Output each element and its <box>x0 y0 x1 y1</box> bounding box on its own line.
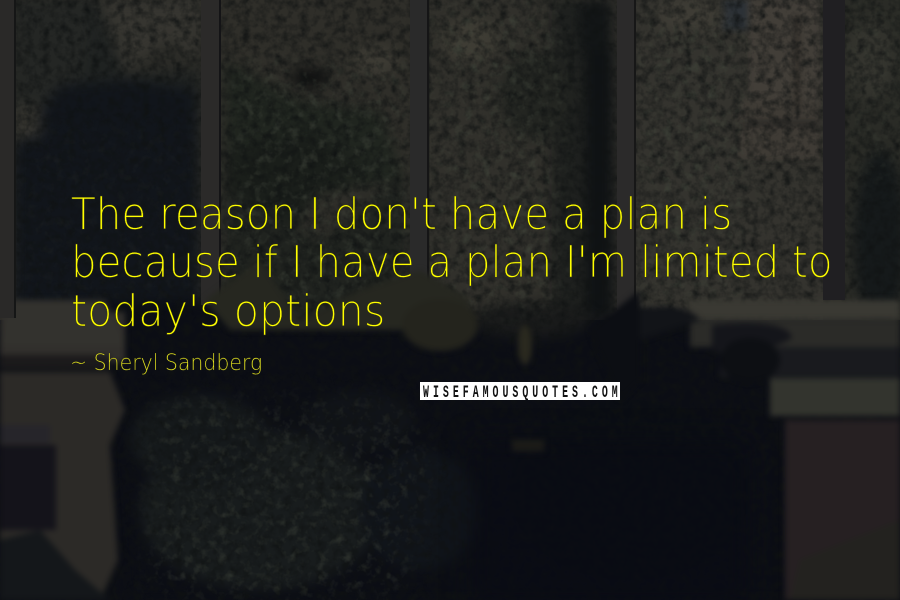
lower foliage mass <box>70 300 900 600</box>
masonry wall at left <box>0 300 125 600</box>
quote line 2: because if I have a plan I'm limited to <box>71 237 833 288</box>
attribution: ~ Sheryl Sandberg <box>70 351 262 376</box>
quote text <box>71 189 833 337</box>
quote line 1: The reason I don't have a plan is <box>71 189 732 240</box>
window frame posts <box>0 0 845 318</box>
masonry ledge at right <box>688 300 900 600</box>
glass panes behind foliage <box>0 0 900 320</box>
foliage over the frame base <box>205 260 700 452</box>
quote line 3: today's options <box>71 286 385 337</box>
distant building <box>722 0 820 160</box>
trees and dark foliage in the upper panes <box>14 0 900 330</box>
deep shadow at the bottom centre <box>470 440 750 600</box>
